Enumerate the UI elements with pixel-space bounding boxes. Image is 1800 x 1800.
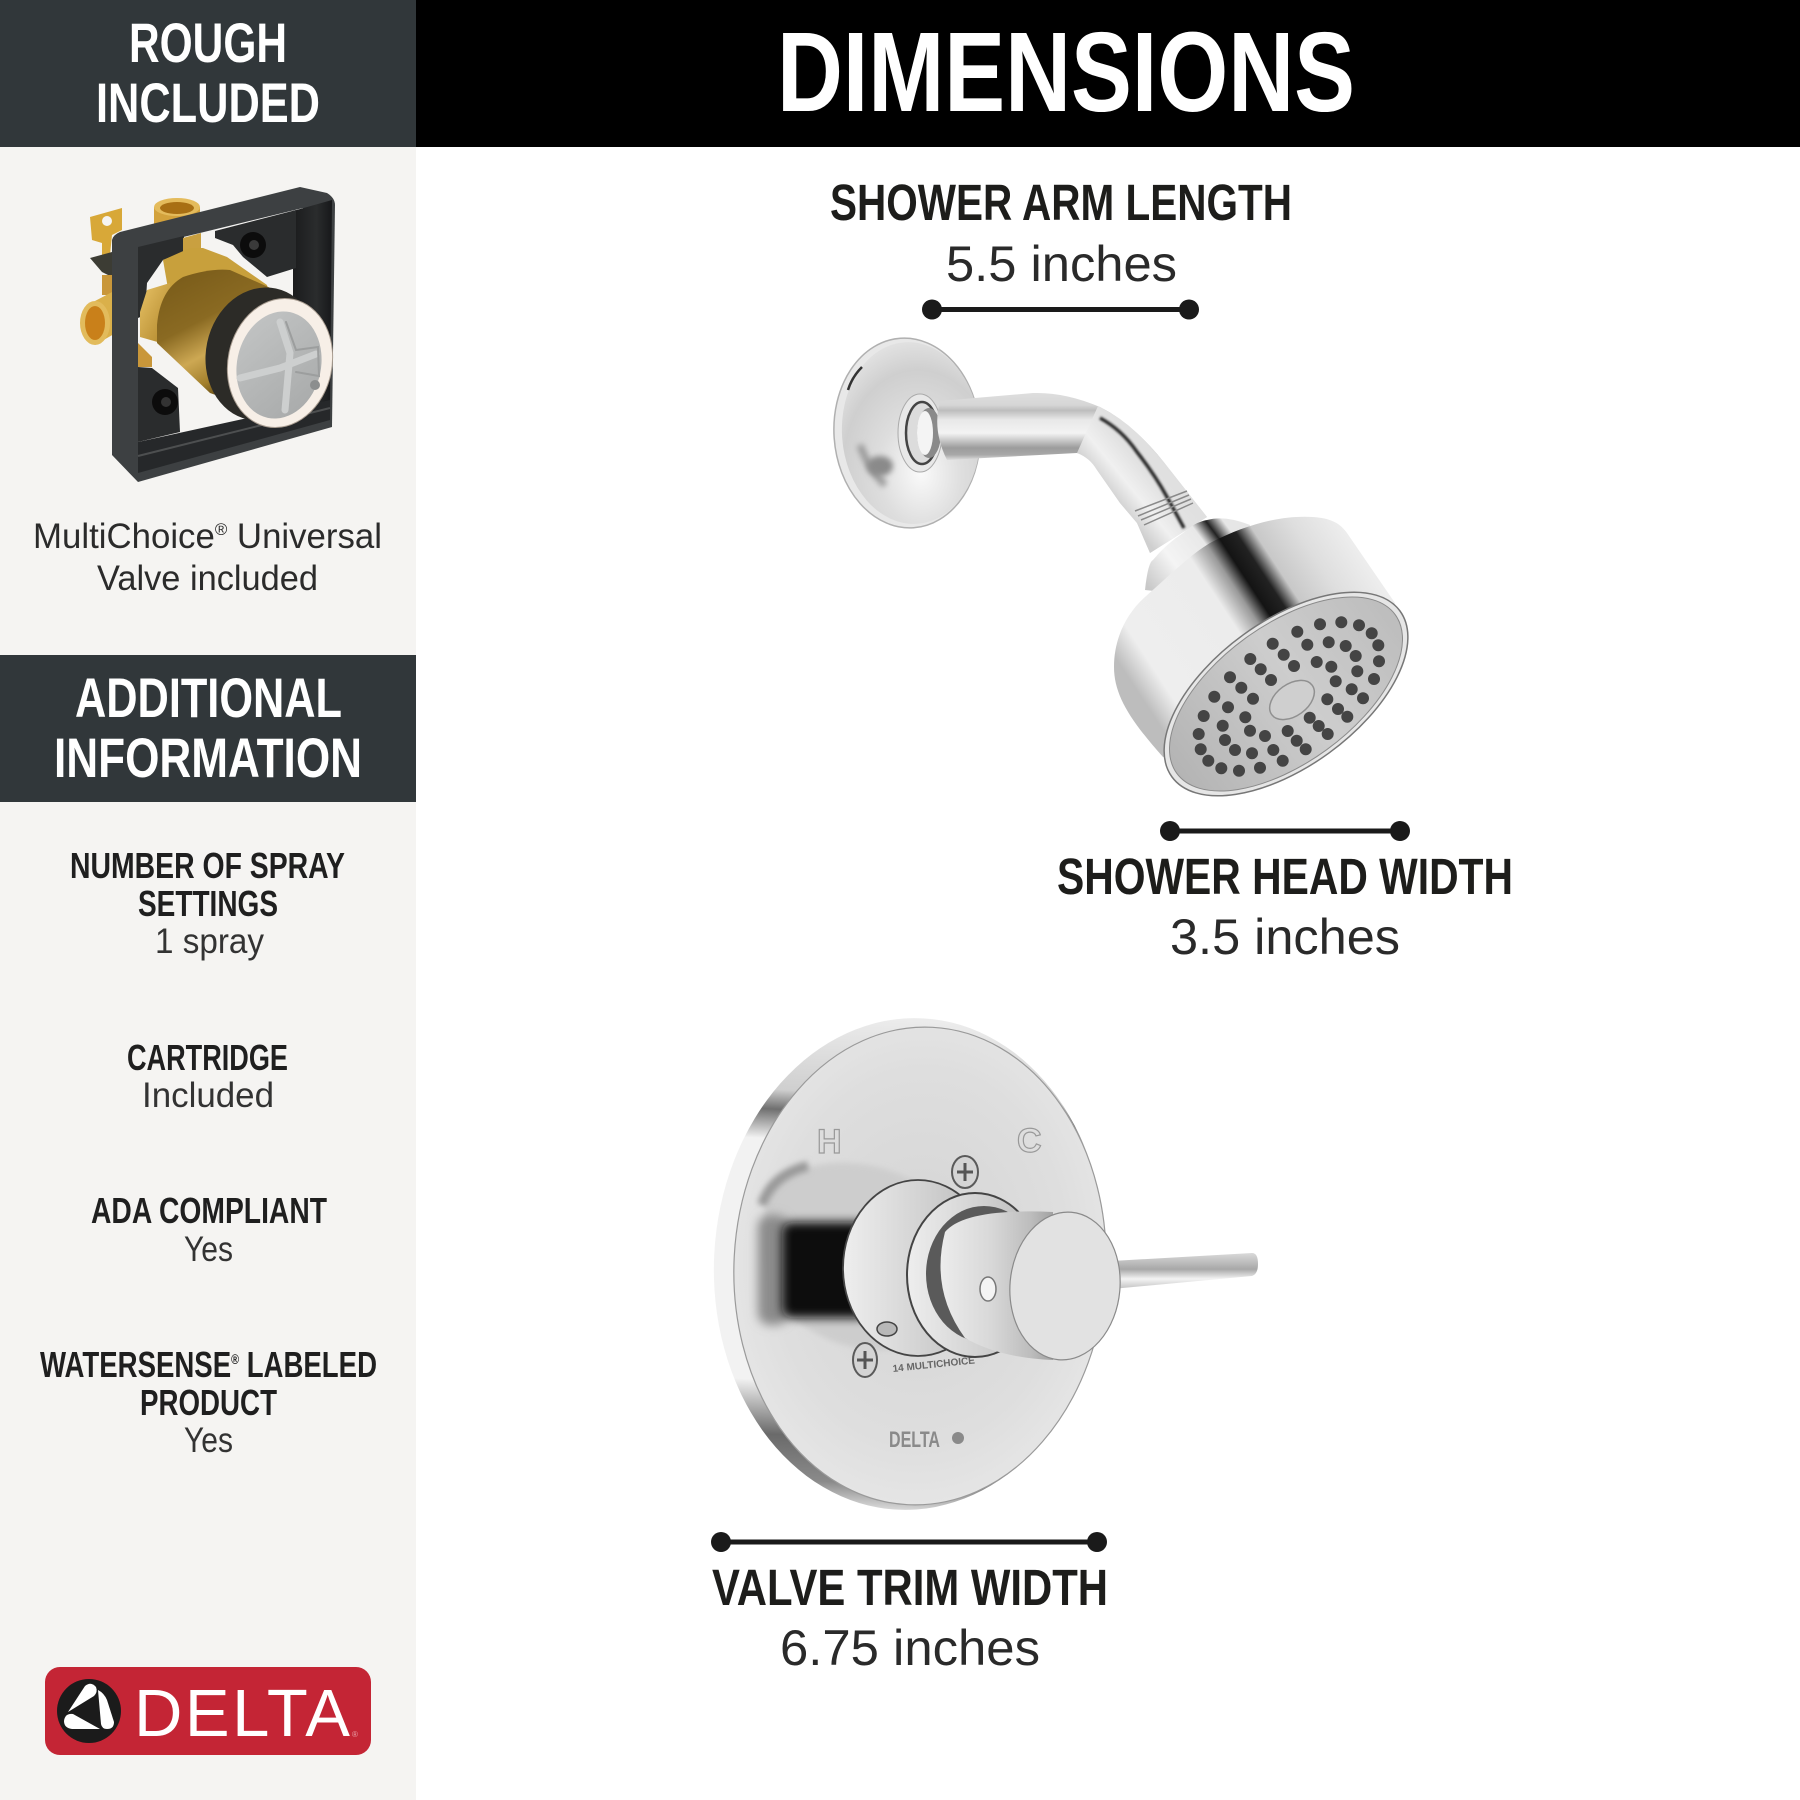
spec: watersense labeled product: PRODUCT xyxy=(140,1382,277,1423)
arm xyxy=(937,393,1207,553)
flange highlights xyxy=(848,367,862,390)
handle hole xyxy=(980,1277,996,1301)
spec: cartridge: CARTRIDGE xyxy=(127,1037,288,1078)
spec: ada compliant: Yes xyxy=(184,1230,233,1269)
spec: watersense labeled product: LABELED xyxy=(239,1344,377,1385)
label: valve trim width: 6.75 inches xyxy=(780,1620,1040,1676)
label: shower head width: 3.5 inches xyxy=(1170,909,1400,965)
plate markings: DELTA xyxy=(889,1427,940,1452)
illustration: valve trim xyxy=(701,1008,1258,1520)
logo: delta: DELTA xyxy=(134,1676,350,1751)
dark ring xyxy=(193,277,331,431)
label: shower arm length: 5.5 inches xyxy=(946,236,1177,292)
dimension line: head width xyxy=(1160,821,1410,841)
label: shower arm length xyxy=(830,174,1292,292)
nozzles xyxy=(1199,622,1379,771)
panel: sidebar background xyxy=(0,0,416,1800)
label: valve trim width xyxy=(712,1559,1108,1676)
plate markings: 14 MULTICHOICE xyxy=(892,1355,976,1375)
nickel ring xyxy=(216,289,344,437)
spec: number of spray settings xyxy=(70,845,345,961)
brass neck xyxy=(183,233,201,262)
right interior wall xyxy=(293,200,332,415)
label: valve trim width: VALVE TRIM WIDTH xyxy=(712,1559,1108,1616)
threads xyxy=(1135,491,1193,525)
logo: delta xyxy=(45,1667,371,1755)
text: multichoice caption: ® xyxy=(215,520,228,539)
hub xyxy=(764,1163,930,1350)
nut xyxy=(898,394,942,472)
center button xyxy=(1262,672,1322,728)
heading: additional information xyxy=(0,655,416,802)
bottom screw xyxy=(853,1343,877,1377)
illustration: shower head and arm xyxy=(828,333,1443,836)
plate markings: H xyxy=(817,1123,842,1161)
brass top nipple xyxy=(154,198,200,234)
spec: watersense labeled product: Yes xyxy=(184,1421,233,1460)
spec: number of spray settings: SETTINGS xyxy=(138,883,278,924)
hub shadow xyxy=(762,1166,808,1205)
text: multichoice caption: Universal xyxy=(227,517,382,556)
spec: ada compliant: ADA COMPLIANT xyxy=(91,1190,327,1231)
handle face xyxy=(1004,1207,1126,1365)
frame opening xyxy=(138,208,303,447)
spec: watersense labeled product: WATERSENSE xyxy=(40,1344,289,1385)
brass left casting xyxy=(140,283,175,347)
brass left nipple xyxy=(80,291,114,345)
plate face xyxy=(722,1018,1118,1514)
flange rim xyxy=(828,333,986,533)
lever xyxy=(1112,1253,1258,1289)
heading: dimensions: DIMENSIONS xyxy=(777,9,1355,135)
head body xyxy=(1114,517,1395,757)
bottom left mount xyxy=(138,367,180,442)
sleeve xyxy=(843,1180,993,1356)
brass clip xyxy=(138,343,152,367)
heading: additional information: INFORMATION xyxy=(54,726,362,789)
spec: cartridge: Included xyxy=(142,1076,274,1115)
small pin xyxy=(877,1322,897,1336)
text: multichoice caption: Valve included xyxy=(97,559,318,598)
grey cap xyxy=(227,303,331,427)
text: multichoice caption xyxy=(33,517,382,598)
logo: delta: ® xyxy=(352,1730,358,1739)
hub dark reflection xyxy=(782,1222,872,1318)
frame floor xyxy=(138,400,330,473)
heading: rough included: ROUGH xyxy=(129,11,287,74)
brass cylinder xyxy=(157,270,275,400)
label: shower head width: SHOWER HEAD WIDTH xyxy=(1057,848,1513,905)
dimension line: arm length xyxy=(922,300,1199,320)
heading: rough included xyxy=(0,0,416,147)
spec: watersense labeled product xyxy=(40,1344,377,1460)
cap ribs xyxy=(240,322,319,410)
spec: watersense labeled product: ® xyxy=(231,1351,240,1367)
spec: cartridge xyxy=(127,1037,288,1115)
label: shower arm length: SHOWER ARM LENGTH xyxy=(830,174,1292,231)
plate rim xyxy=(701,1008,1119,1520)
spec: number of spray settings: NUMBER OF SPRAY xyxy=(70,845,345,886)
text: multichoice caption: MultiChoice xyxy=(33,517,216,556)
ring groove xyxy=(926,1206,1042,1342)
collar ring xyxy=(907,1193,1043,1357)
label: shower head width xyxy=(1057,848,1513,965)
plate markings: C xyxy=(1017,1122,1042,1160)
collar xyxy=(1145,518,1250,600)
flange face xyxy=(836,337,986,529)
icon: rough-in valve xyxy=(80,187,344,482)
handle cylinder xyxy=(940,1211,1053,1360)
heading: additional information: ADDITIONAL xyxy=(75,666,342,729)
left top panel xyxy=(138,236,184,318)
top screw xyxy=(952,1156,978,1188)
spec: number of spray settings: 1 spray xyxy=(155,922,264,961)
arm bend xyxy=(1077,406,1207,553)
brass mounting bracket xyxy=(90,208,122,295)
black plastic frame xyxy=(112,187,335,482)
plate markings xyxy=(817,1122,1042,1452)
arm dark reflection xyxy=(1100,418,1184,528)
hub left side shading xyxy=(758,1215,788,1325)
heading: dimensions xyxy=(416,0,1800,147)
head face xyxy=(1129,552,1443,836)
dimension line: valve trim width xyxy=(711,1532,1107,1552)
heading: rough included: INCLUDED xyxy=(96,71,320,134)
top right mount xyxy=(215,210,296,277)
spec: ada compliant xyxy=(91,1190,327,1269)
brass upper casting xyxy=(163,248,270,300)
